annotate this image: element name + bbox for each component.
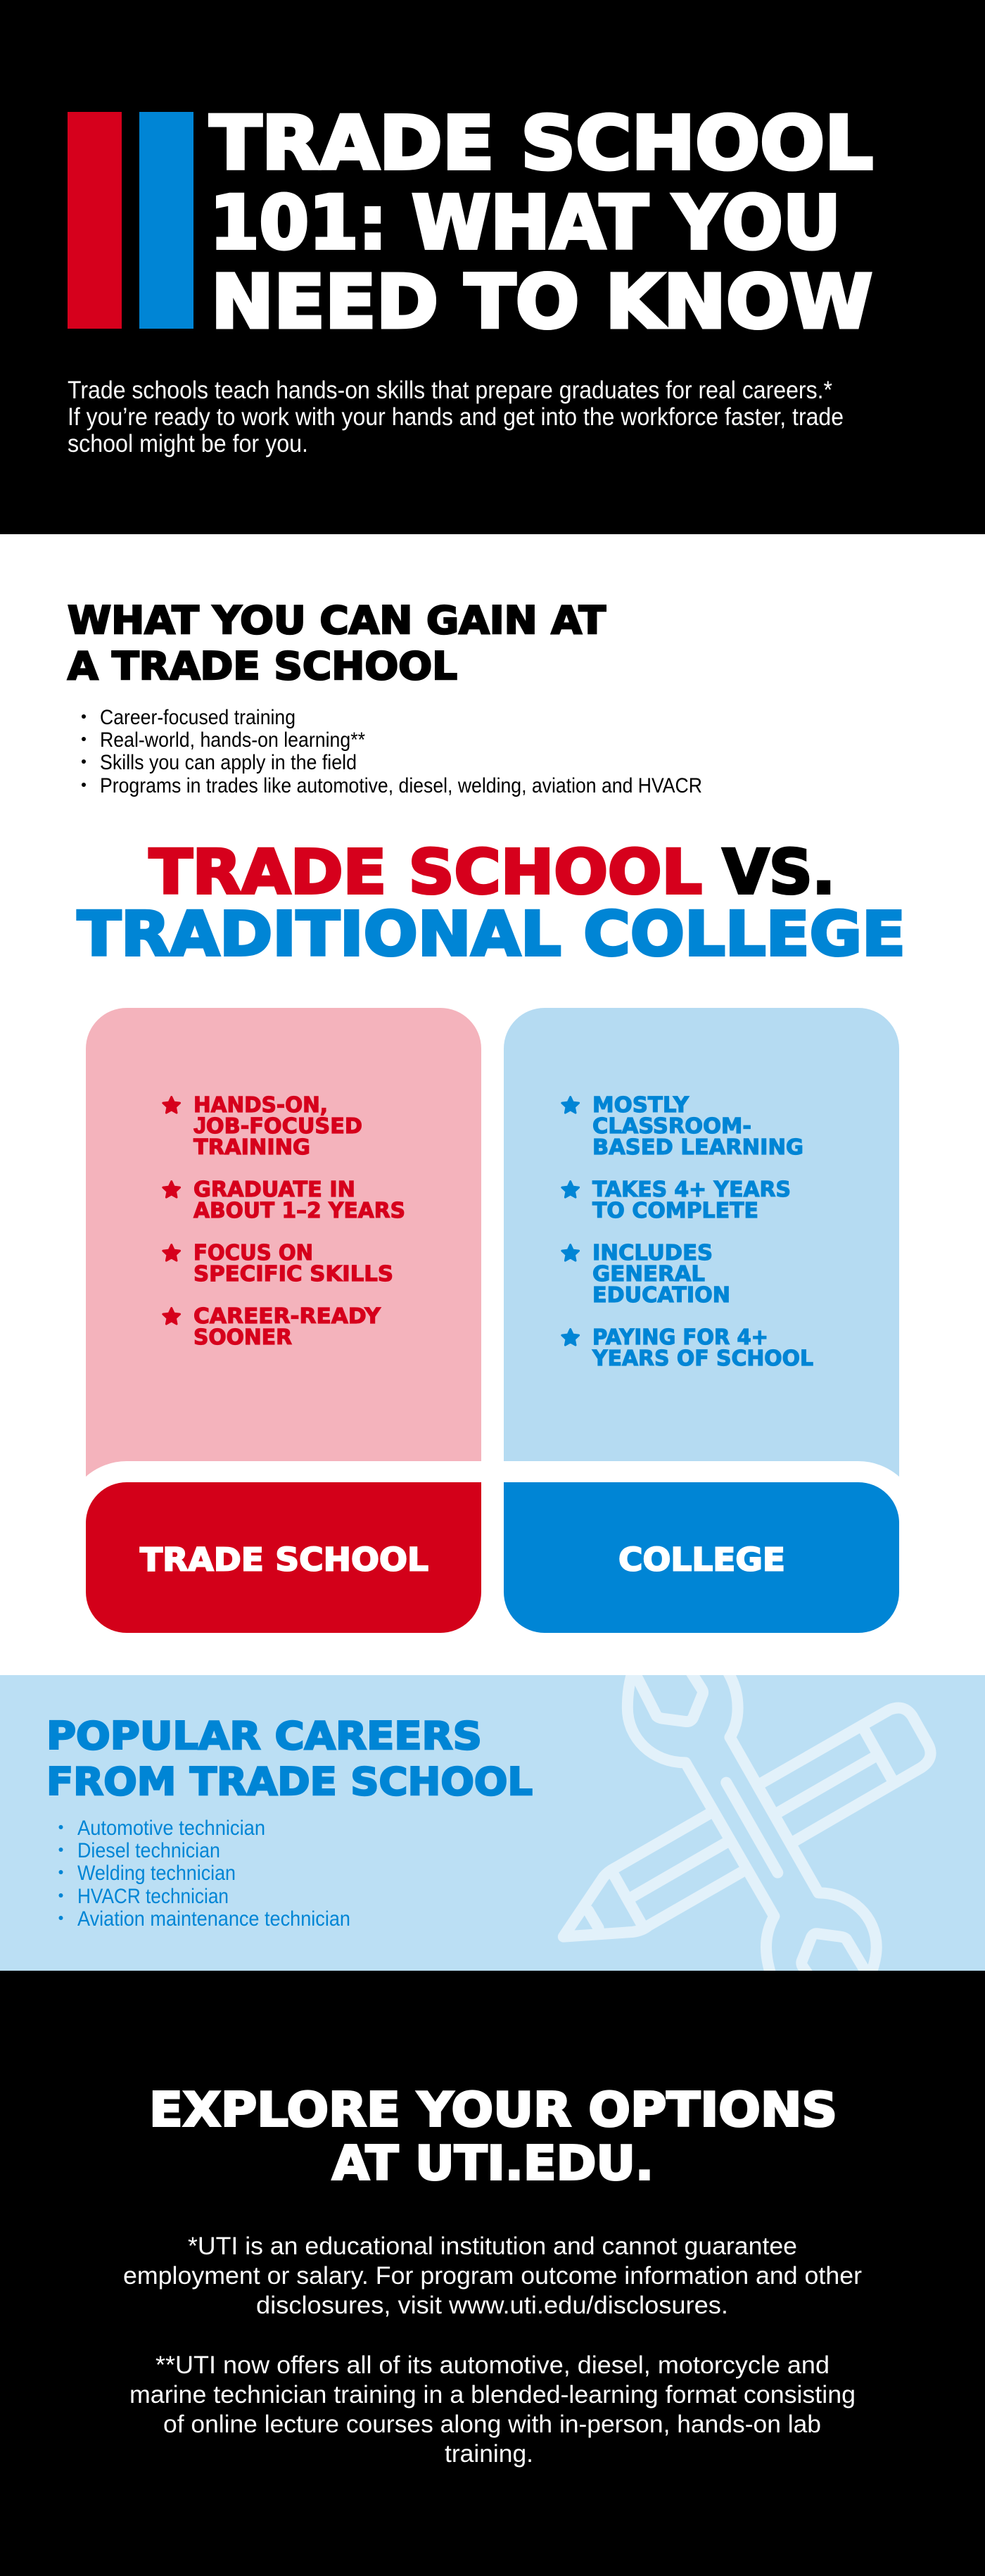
icon: star bbox=[163, 1097, 180, 1113]
heading: explore your options: AT UTI.EDU. bbox=[332, 2135, 654, 2190]
list: college points bbox=[562, 1093, 813, 1371]
list: college points: CLASSROOM- bbox=[592, 1114, 751, 1139]
icon: red bar bbox=[68, 112, 122, 329]
label box: trade school bbox=[86, 1482, 481, 1633]
panel: footer bbox=[0, 1971, 985, 2576]
list: trade school points: SPECIFIC SKILLS bbox=[193, 1262, 393, 1287]
intro text bbox=[68, 377, 844, 457]
bullet list: careers bbox=[59, 1817, 350, 1931]
icon: crossed wrench and pencil bbox=[564, 1666, 931, 1978]
title bbox=[210, 100, 873, 345]
bullet list: careers: Welding technician bbox=[77, 1862, 236, 1885]
bullet list: careers: Automotive technician bbox=[77, 1817, 265, 1840]
panel: what you can gain bbox=[68, 598, 702, 797]
bullet list: careers: Aviation maintenance technician bbox=[77, 1907, 350, 1931]
disclosures text: disclosures, visit www.uti.edu/disclosures. bbox=[256, 2292, 728, 2319]
bullet list: careers: HVACR technician bbox=[77, 1885, 229, 1908]
icon: blue bar bbox=[139, 112, 193, 329]
heading: popular careers: POPULAR CAREERS bbox=[46, 1714, 482, 1758]
heading: trade school vs traditional college: TRADE SCHOOL bbox=[149, 838, 702, 908]
bullet list: gains: Programs in trades like automotive, diesel, welding, aviation and HVACR bbox=[100, 774, 702, 797]
panel: popular careers bbox=[0, 1666, 985, 1978]
list: college points: TAKES 4+ YEARS bbox=[592, 1177, 791, 1202]
list: college points: TO COMPLETE bbox=[592, 1199, 758, 1223]
bullet list: careers: Diesel technician bbox=[77, 1839, 220, 1862]
icon: star bbox=[163, 1181, 180, 1197]
list: trade school points: GRADUATE IN bbox=[193, 1177, 355, 1202]
icon: star bbox=[562, 1181, 579, 1197]
intro text: school might be for you. bbox=[68, 430, 308, 457]
heading: explore your options bbox=[149, 2082, 837, 2190]
list: college points: EDUCATION bbox=[592, 1283, 730, 1308]
disclosures text bbox=[123, 2233, 862, 2468]
title: TRADE SCHOOL bbox=[210, 100, 873, 186]
icon: star bbox=[163, 1308, 180, 1324]
heading: what you can gain bbox=[68, 598, 606, 688]
label box: college bbox=[504, 1482, 899, 1633]
list: trade school points: HANDS-ON, bbox=[193, 1093, 328, 1118]
list: college points: MOSTLY bbox=[592, 1093, 690, 1118]
heading: what you can gain: WHAT YOU CAN GAIN AT bbox=[68, 598, 606, 643]
icon: star bbox=[562, 1097, 579, 1113]
list: trade school points: ABOUT 1–2 YEARS bbox=[193, 1199, 405, 1223]
list: trade school points: TRAINING bbox=[193, 1135, 310, 1160]
list: trade school points: CAREER-READY bbox=[193, 1304, 381, 1329]
list: college points: BASED LEARNING bbox=[592, 1135, 803, 1160]
list: college points: GENERAL bbox=[592, 1262, 705, 1287]
disclosures text: training. bbox=[445, 2440, 533, 2468]
disclosures text: employment or salary. For program outcome information and other bbox=[123, 2262, 862, 2290]
heading: what you can gain: A TRADE SCHOOL bbox=[68, 644, 457, 688]
heading: trade school vs traditional college: VS. bbox=[723, 838, 835, 908]
intro text: Trade schools teach hands-on skills that prepare graduates for real careers.* bbox=[68, 377, 832, 404]
title: 101: WHAT YOU bbox=[210, 180, 841, 266]
panel: header bbox=[0, 0, 985, 534]
icon: star bbox=[562, 1244, 579, 1261]
list: trade school points: JOB-FOCUSED bbox=[193, 1113, 362, 1139]
disclosures text: **UTI now offers all of its automotive, diesel, motorcycle and bbox=[155, 2351, 830, 2379]
heading: explore your options: EXPLORE YOUR OPTIONS bbox=[149, 2082, 837, 2137]
bullet list: gains: Career-focused training bbox=[100, 706, 296, 729]
intro text: If you’re ready to work with your hands and get into the workforce faster, trade bbox=[68, 403, 844, 431]
heading: popular careers: FROM TRADE SCHOOL bbox=[46, 1760, 533, 1804]
list: college points: PAYING FOR 4+ bbox=[592, 1325, 768, 1350]
disclosures text: marine technician training in a blended-learning format consisting bbox=[129, 2381, 856, 2408]
bullet list: gains: Skills you can apply in the field bbox=[100, 751, 357, 774]
disclosures text: of online lecture courses along with in-person, hands-on lab bbox=[163, 2411, 821, 2438]
label box: trade school: TRADE SCHOOL bbox=[140, 1541, 428, 1578]
list: trade school points: FOCUS ON bbox=[193, 1241, 313, 1265]
list: trade school points: SOONER bbox=[193, 1325, 292, 1350]
label box: college: COLLEGE bbox=[618, 1541, 785, 1578]
title: NEED TO KNOW bbox=[211, 259, 872, 345]
bullet list: gains bbox=[82, 706, 702, 797]
heading: trade school vs traditional college bbox=[77, 838, 905, 970]
icon: star bbox=[562, 1329, 579, 1345]
list: college points: INCLUDES bbox=[592, 1241, 713, 1265]
list: trade school points bbox=[163, 1093, 405, 1350]
panel: trade school comparison bbox=[86, 1008, 481, 1633]
heading: popular careers bbox=[46, 1714, 533, 1804]
disclosures text: *UTI is an educational institution and cannot guarantee bbox=[188, 2233, 797, 2260]
heading: trade school vs traditional college: TRADITIONAL COLLEGE bbox=[77, 899, 905, 970]
list: college points: YEARS OF SCHOOL bbox=[592, 1346, 813, 1371]
icon: star bbox=[163, 1244, 180, 1261]
panel: college comparison bbox=[504, 1008, 899, 1633]
bullet list: gains: Real-world, hands-on learning** bbox=[100, 728, 365, 752]
